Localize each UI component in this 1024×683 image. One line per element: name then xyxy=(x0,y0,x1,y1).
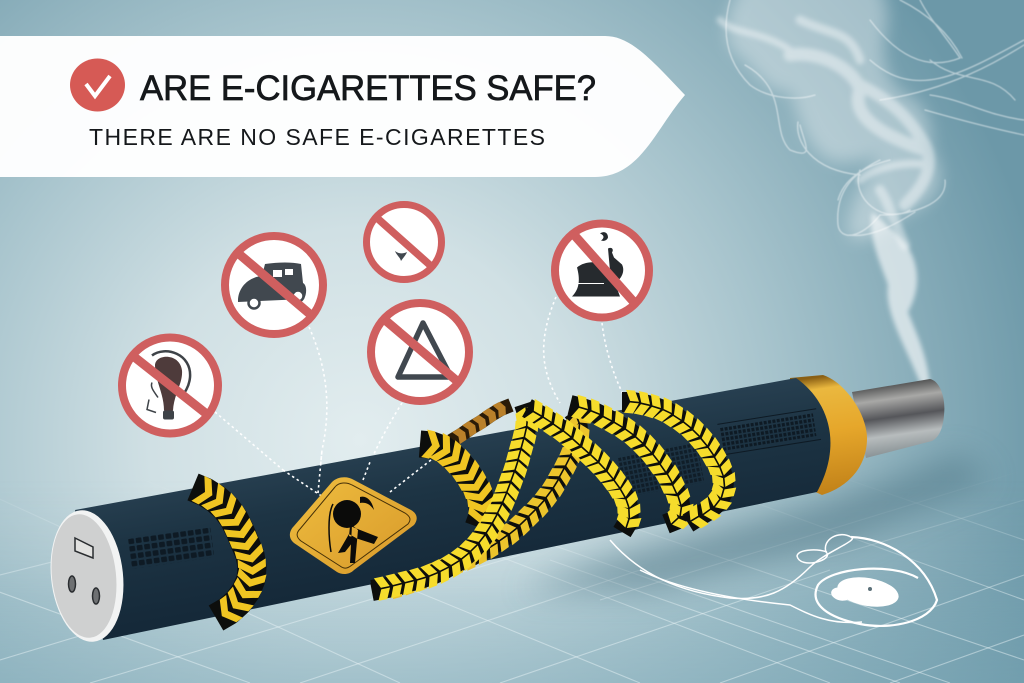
left speaker grille xyxy=(128,527,214,569)
smoke: thin wisps xyxy=(726,0,1024,235)
prohibition sign: car xyxy=(225,236,323,334)
prohibition sign: light bulb xyxy=(122,338,218,434)
title: ARE E-CIGARETTES SAFE? xyxy=(140,69,596,108)
cable lower strand xyxy=(640,570,862,623)
icon: triangle xyxy=(398,323,451,377)
banner xyxy=(0,36,685,177)
icon: iron xyxy=(572,232,623,296)
cable outer loop xyxy=(816,537,937,626)
body xyxy=(75,378,830,640)
earbud dot xyxy=(868,587,872,591)
smoke: lower plume xyxy=(871,212,930,385)
icon: car xyxy=(238,262,306,308)
steel tip xyxy=(852,379,944,458)
caution ribbon: main braid xyxy=(372,404,527,590)
caution ribbon: loop two xyxy=(570,405,681,524)
dashed line over body xyxy=(283,450,370,497)
caution ribbon: chevron strap xyxy=(420,444,482,527)
earbud blob xyxy=(835,573,901,611)
dashed line from sign to band xyxy=(390,453,440,492)
floor grid xyxy=(0,500,1024,683)
caution ribbon: loop one xyxy=(527,408,629,532)
caution ribbon: loop three xyxy=(622,402,724,523)
caution ribbon: brown strap xyxy=(451,405,511,441)
icon: red check badge xyxy=(70,58,125,112)
subtitle: THERE ARE NO SAFE E-CIGARETTES xyxy=(89,124,545,150)
white earbud cable xyxy=(610,535,937,626)
jack: left xyxy=(68,576,76,592)
warning sign xyxy=(290,477,417,574)
banner shape xyxy=(0,36,685,177)
prohibition sign: triangle xyxy=(371,303,469,401)
prohibition sign: top xyxy=(366,204,442,280)
middle speaker grille xyxy=(618,443,704,497)
e-cigarette xyxy=(44,375,944,645)
charging port xyxy=(75,538,93,558)
shadow under e-cigarette xyxy=(520,455,990,590)
smoke: broad translucent cloud xyxy=(726,0,940,240)
gold collar xyxy=(790,375,867,495)
end cap xyxy=(44,507,130,645)
icon: bulb xyxy=(147,351,190,420)
smoke: bright inner streaks xyxy=(720,20,930,245)
caution ribbon: lower braid xyxy=(372,412,579,592)
cable strand xyxy=(610,535,852,599)
walking figure xyxy=(329,497,378,563)
prohibition sign: iron xyxy=(555,224,649,318)
smoke plume xyxy=(720,0,1024,385)
dashed connector lines xyxy=(215,297,627,497)
right speaker grille xyxy=(717,409,821,455)
jack: right xyxy=(92,588,100,604)
earbud small blob xyxy=(830,586,852,602)
left chevron band xyxy=(193,487,252,618)
icon: small crescent xyxy=(395,251,407,261)
sign plate xyxy=(290,477,417,574)
sign inner outline xyxy=(297,483,410,568)
